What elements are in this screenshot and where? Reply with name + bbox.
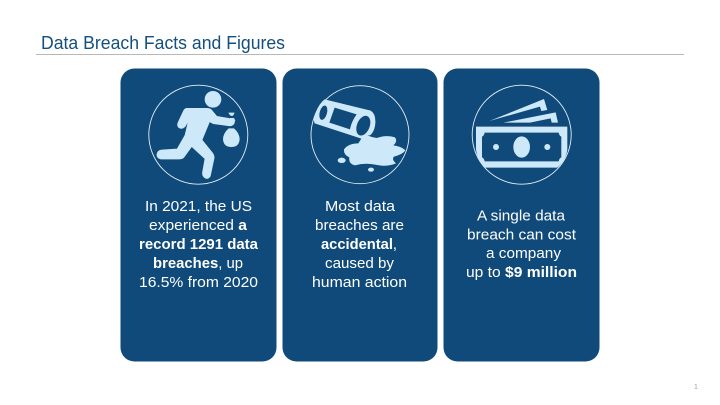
icon: tipped barrel spilling bbox=[311, 86, 409, 184]
text: record 1291 data breaches: experienced a bbox=[149, 218, 248, 234]
text: record 1291 data breaches: record 1291 data bbox=[139, 237, 259, 253]
page number: 1 bbox=[694, 384, 698, 391]
text: mostly accidental: breaches are bbox=[315, 218, 404, 234]
icon: thief running with bag bbox=[149, 85, 248, 184]
text: record 1291 data breaches: 16.5% from 2020 bbox=[139, 275, 258, 291]
text: up to $9 million: up to $9 million bbox=[466, 265, 577, 281]
text: mostly accidental: human action bbox=[312, 275, 407, 291]
text: record 1291 data breaches: breaches, up bbox=[153, 256, 243, 272]
panel: accidental breaches bbox=[282, 68, 438, 362]
text: record 1291 data breaches: In 2021, the US bbox=[145, 199, 252, 215]
icon: stack of banknotes bbox=[472, 85, 571, 184]
text: mostly accidental: caused by bbox=[325, 256, 395, 272]
text: up to $9 million: A single data bbox=[477, 208, 566, 224]
text: up to $9 million bbox=[466, 208, 577, 281]
title: Data Breach Facts and Figures bbox=[41, 33, 285, 53]
text: mostly accidental: accidental, bbox=[321, 237, 397, 253]
panel: breach cost bbox=[444, 68, 600, 362]
panel: record breaches bbox=[120, 68, 276, 362]
text: up to $9 million: a company bbox=[486, 246, 562, 262]
text: record 1291 data breaches bbox=[139, 199, 259, 291]
text: up to $9 million: breach can cost bbox=[467, 228, 576, 244]
text: mostly accidental bbox=[312, 199, 407, 291]
text: mostly accidental: Most data bbox=[325, 199, 396, 215]
